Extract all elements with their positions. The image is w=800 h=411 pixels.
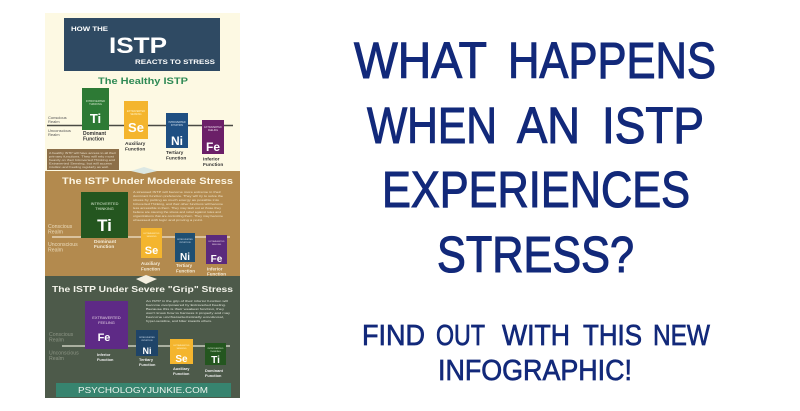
realm labels: Unconscious xyxy=(48,242,78,248)
heading: the healthy ISTP: The Healthy ISTP xyxy=(98,76,188,86)
function: Se auxiliary: SENSING xyxy=(130,113,142,116)
heading: severe stress: The ISTP Under Severe "Grip" Stress xyxy=(52,284,233,294)
realm labels: Unconscious xyxy=(48,128,71,133)
function: Se auxiliary: SENSING xyxy=(147,236,157,238)
function: Fe inferior: Function xyxy=(207,272,226,276)
function: Ni tertiary: Tertiary xyxy=(176,263,193,268)
text block: moderate description: obsessed with logic and proving a point. xyxy=(133,218,203,222)
function: Ni tertiary: INTUITION xyxy=(171,124,183,127)
function: Fe inferior: Inferior xyxy=(97,352,111,357)
headline: STRESS? xyxy=(437,226,634,283)
header banner: REACTS TO STRESS xyxy=(135,60,215,66)
function: Ti dominant: Ti xyxy=(211,355,220,366)
headline: HAPPENS xyxy=(508,32,716,89)
realm labels: Conscious xyxy=(48,224,73,230)
subheading: OUT xyxy=(436,320,485,352)
function: Ti dominant: THINKING xyxy=(95,206,114,211)
realm labels: Conscious xyxy=(49,332,74,338)
function: Ti dominant xyxy=(82,88,109,142)
function: Se auxiliary xyxy=(124,101,148,152)
function: Ni tertiary: Ni xyxy=(180,252,190,263)
realm labels: Realm xyxy=(49,338,64,344)
function: Fe inferior: FEELING xyxy=(98,320,115,325)
text block: moderate description: dominant function preference. They will try to solve the xyxy=(133,194,223,198)
function: Fe inferior: EXTRAVERTED xyxy=(204,126,222,129)
function: Ti dominant: Ti xyxy=(97,216,112,235)
function: Fe inferior: Fe xyxy=(211,254,223,265)
function: Ti dominant xyxy=(81,192,128,250)
diamond connector xyxy=(131,167,157,174)
text block: severe description: hyper-sensitive, and bitter towards others. xyxy=(146,319,212,323)
subheading: NEW xyxy=(653,320,711,352)
function: Se auxiliary: Se xyxy=(145,245,158,257)
text block: moderate description: organizations that are controlling them. They may become xyxy=(133,214,223,218)
function: Ni tertiary: Ni xyxy=(142,346,152,356)
function: Ni tertiary: Function xyxy=(166,156,186,162)
function: Ni tertiary: INTROVERTED xyxy=(168,121,186,124)
realm labels xyxy=(48,115,71,137)
headline: WHAT xyxy=(354,32,487,89)
text block: healthy description: Extraverted Sensing, but will access xyxy=(49,162,113,166)
function: Ti dominant: THINKING xyxy=(210,351,221,353)
function: Ti dominant: Ti xyxy=(90,111,101,126)
function: Fe inferior: FEELING xyxy=(208,129,218,132)
realm labels: Realm xyxy=(49,356,64,362)
function: Ni tertiary: INTROVERTED xyxy=(177,239,193,241)
text block: healthy description: heavily on their Introverted Thinking and xyxy=(49,158,116,162)
function: Se auxiliary: Se xyxy=(128,120,144,135)
heading: moderate stress: The ISTP Under Moderate Stress xyxy=(62,176,233,186)
headline: ISTP xyxy=(602,97,704,154)
text block: healthy description: intuition and Feeling regularly as well. xyxy=(49,165,109,169)
function: Fe inferior: EXTRAVERTED xyxy=(92,315,121,320)
function: Ti dominant: THINKING xyxy=(89,102,102,106)
function: Ni tertiary: Function xyxy=(176,268,195,274)
text block: severe description: won't know how to harness it properly and may xyxy=(146,311,231,315)
panel: moderate stress xyxy=(45,167,240,276)
function: Se auxiliary: Function xyxy=(141,266,160,272)
function: Ni tertiary: INTUITION xyxy=(180,242,191,244)
function: Fe inferior: Fe xyxy=(206,140,220,154)
function: Se auxiliary: Auxiliary xyxy=(125,141,146,147)
function: Ni tertiary: INTUITION xyxy=(142,340,153,342)
function: Ti dominant: Function xyxy=(94,244,114,250)
function: Fe inferior xyxy=(85,301,128,362)
header banner: HOW THE xyxy=(71,27,108,33)
function: Ni tertiary xyxy=(136,330,158,367)
function: Ni tertiary: Function xyxy=(139,362,156,367)
function: Ni tertiary xyxy=(166,113,188,162)
headline: EXPERIENCES xyxy=(382,161,690,218)
function: Fe inferior: Function xyxy=(97,357,114,362)
realm labels xyxy=(48,224,78,254)
function: Ni tertiary: Tertiary xyxy=(139,357,154,362)
function: Ti dominant: Function xyxy=(205,373,222,378)
realm labels: Realm xyxy=(48,248,63,254)
subheading xyxy=(362,320,711,387)
function: Se auxiliary: EXTRAVERTED xyxy=(174,344,190,347)
function: Se auxiliary xyxy=(170,339,193,376)
realm labels: Realm xyxy=(48,119,60,124)
function: Ti dominant: INTROVERTED xyxy=(208,348,224,350)
function: Ti dominant: Dominant xyxy=(83,131,106,137)
text block: healthy description xyxy=(47,149,119,170)
function: Se auxiliary xyxy=(141,228,162,272)
function: Fe inferior: FEELING xyxy=(212,244,221,246)
header banner: ISTP xyxy=(109,33,167,58)
text block: moderate description: A stressed ISTP will become more extreme in their xyxy=(133,190,221,194)
text block: severe description: become uncharacteristically emotional, xyxy=(146,315,224,319)
header banner xyxy=(64,18,220,71)
text block: severe description xyxy=(146,299,231,323)
function: Ti dominant: Dominant xyxy=(205,368,224,373)
function: Se auxiliary: EXTRAVERTED xyxy=(127,110,145,113)
function: Ti dominant: INTROVERTED xyxy=(91,201,119,206)
function: Fe inferior xyxy=(206,235,227,276)
function: Se auxiliary: EXTRAVERTED xyxy=(144,232,160,235)
text block: moderate description: believe are causing the stress and rebel against rules and xyxy=(133,210,221,214)
panel: healthy ISTP xyxy=(45,13,240,171)
function: Se auxiliary: Function xyxy=(125,146,145,152)
function: Se auxiliary: Se xyxy=(175,354,188,365)
text block: healthy description: primary functions. They will rely most xyxy=(49,154,114,158)
function: Se auxiliary: Function xyxy=(173,371,190,376)
function: Ni tertiary xyxy=(175,233,195,274)
subheading: THIS xyxy=(583,320,642,352)
function: Ti dominant: INTROVERTED xyxy=(86,99,105,103)
function: Se auxiliary: Auxiliary xyxy=(141,261,161,266)
text block: moderate description: less accessible to them. They may lash out at those they xyxy=(133,206,222,210)
function: Fe inferior xyxy=(202,120,224,168)
subheading: INFOGRAPHIC! xyxy=(438,355,632,387)
headline: WHEN xyxy=(367,97,497,154)
realm labels: Realm xyxy=(48,230,63,236)
function: Fe inferior: Inferior xyxy=(203,156,220,162)
function: Ti dominant: Dominant xyxy=(94,239,117,245)
function: Ti dominant: Function xyxy=(83,136,104,142)
text block: severe description: An ISTP in the grip of their inferior function will xyxy=(146,299,228,303)
function: Ni tertiary: Tertiary xyxy=(166,150,184,156)
headline: AN xyxy=(517,97,580,154)
realm labels: Unconscious xyxy=(49,350,79,356)
text block: healthy description: A healthy ISTP will have access to all their xyxy=(49,151,116,155)
realm labels: Conscious xyxy=(48,115,67,120)
text block: moderate description xyxy=(133,190,223,222)
realm labels: Realm xyxy=(48,132,60,137)
headline xyxy=(354,32,716,283)
function: Ni tertiary: INTROVERTED xyxy=(139,337,155,339)
subheading: WITH xyxy=(502,320,570,352)
text block: moderate description: Introverted Thinking, and their other functions will become xyxy=(133,202,223,206)
panel: infographic thumbnail xyxy=(45,13,240,398)
subheading: FIND xyxy=(362,320,425,352)
footer banner: PSYCHOLOGYJUNKIE.COM xyxy=(78,385,208,395)
function: Se auxiliary: Auxiliary xyxy=(173,366,190,371)
text block: moderate description: stress by putting as much energy as possible into xyxy=(133,198,219,202)
function: Fe inferior: EXTRAVERTED xyxy=(209,240,225,243)
panel: severe grip stress xyxy=(45,275,240,398)
function: Ti dominant xyxy=(205,343,226,378)
function: Ni tertiary: Ni xyxy=(171,134,183,148)
function: Fe inferior: Inferior xyxy=(207,266,223,272)
diamond connector xyxy=(136,275,157,284)
function: Fe inferior: Function xyxy=(203,162,223,168)
text block: severe description: become overpowered by Extraverted Feeling. xyxy=(146,303,226,307)
function: Se auxiliary: SENSING xyxy=(177,348,187,350)
footer banner xyxy=(56,383,231,397)
text block: severe description: Because this is their weakest function, they xyxy=(146,307,225,311)
function: Fe inferior: Fe xyxy=(98,332,110,344)
realm labels xyxy=(49,332,79,362)
